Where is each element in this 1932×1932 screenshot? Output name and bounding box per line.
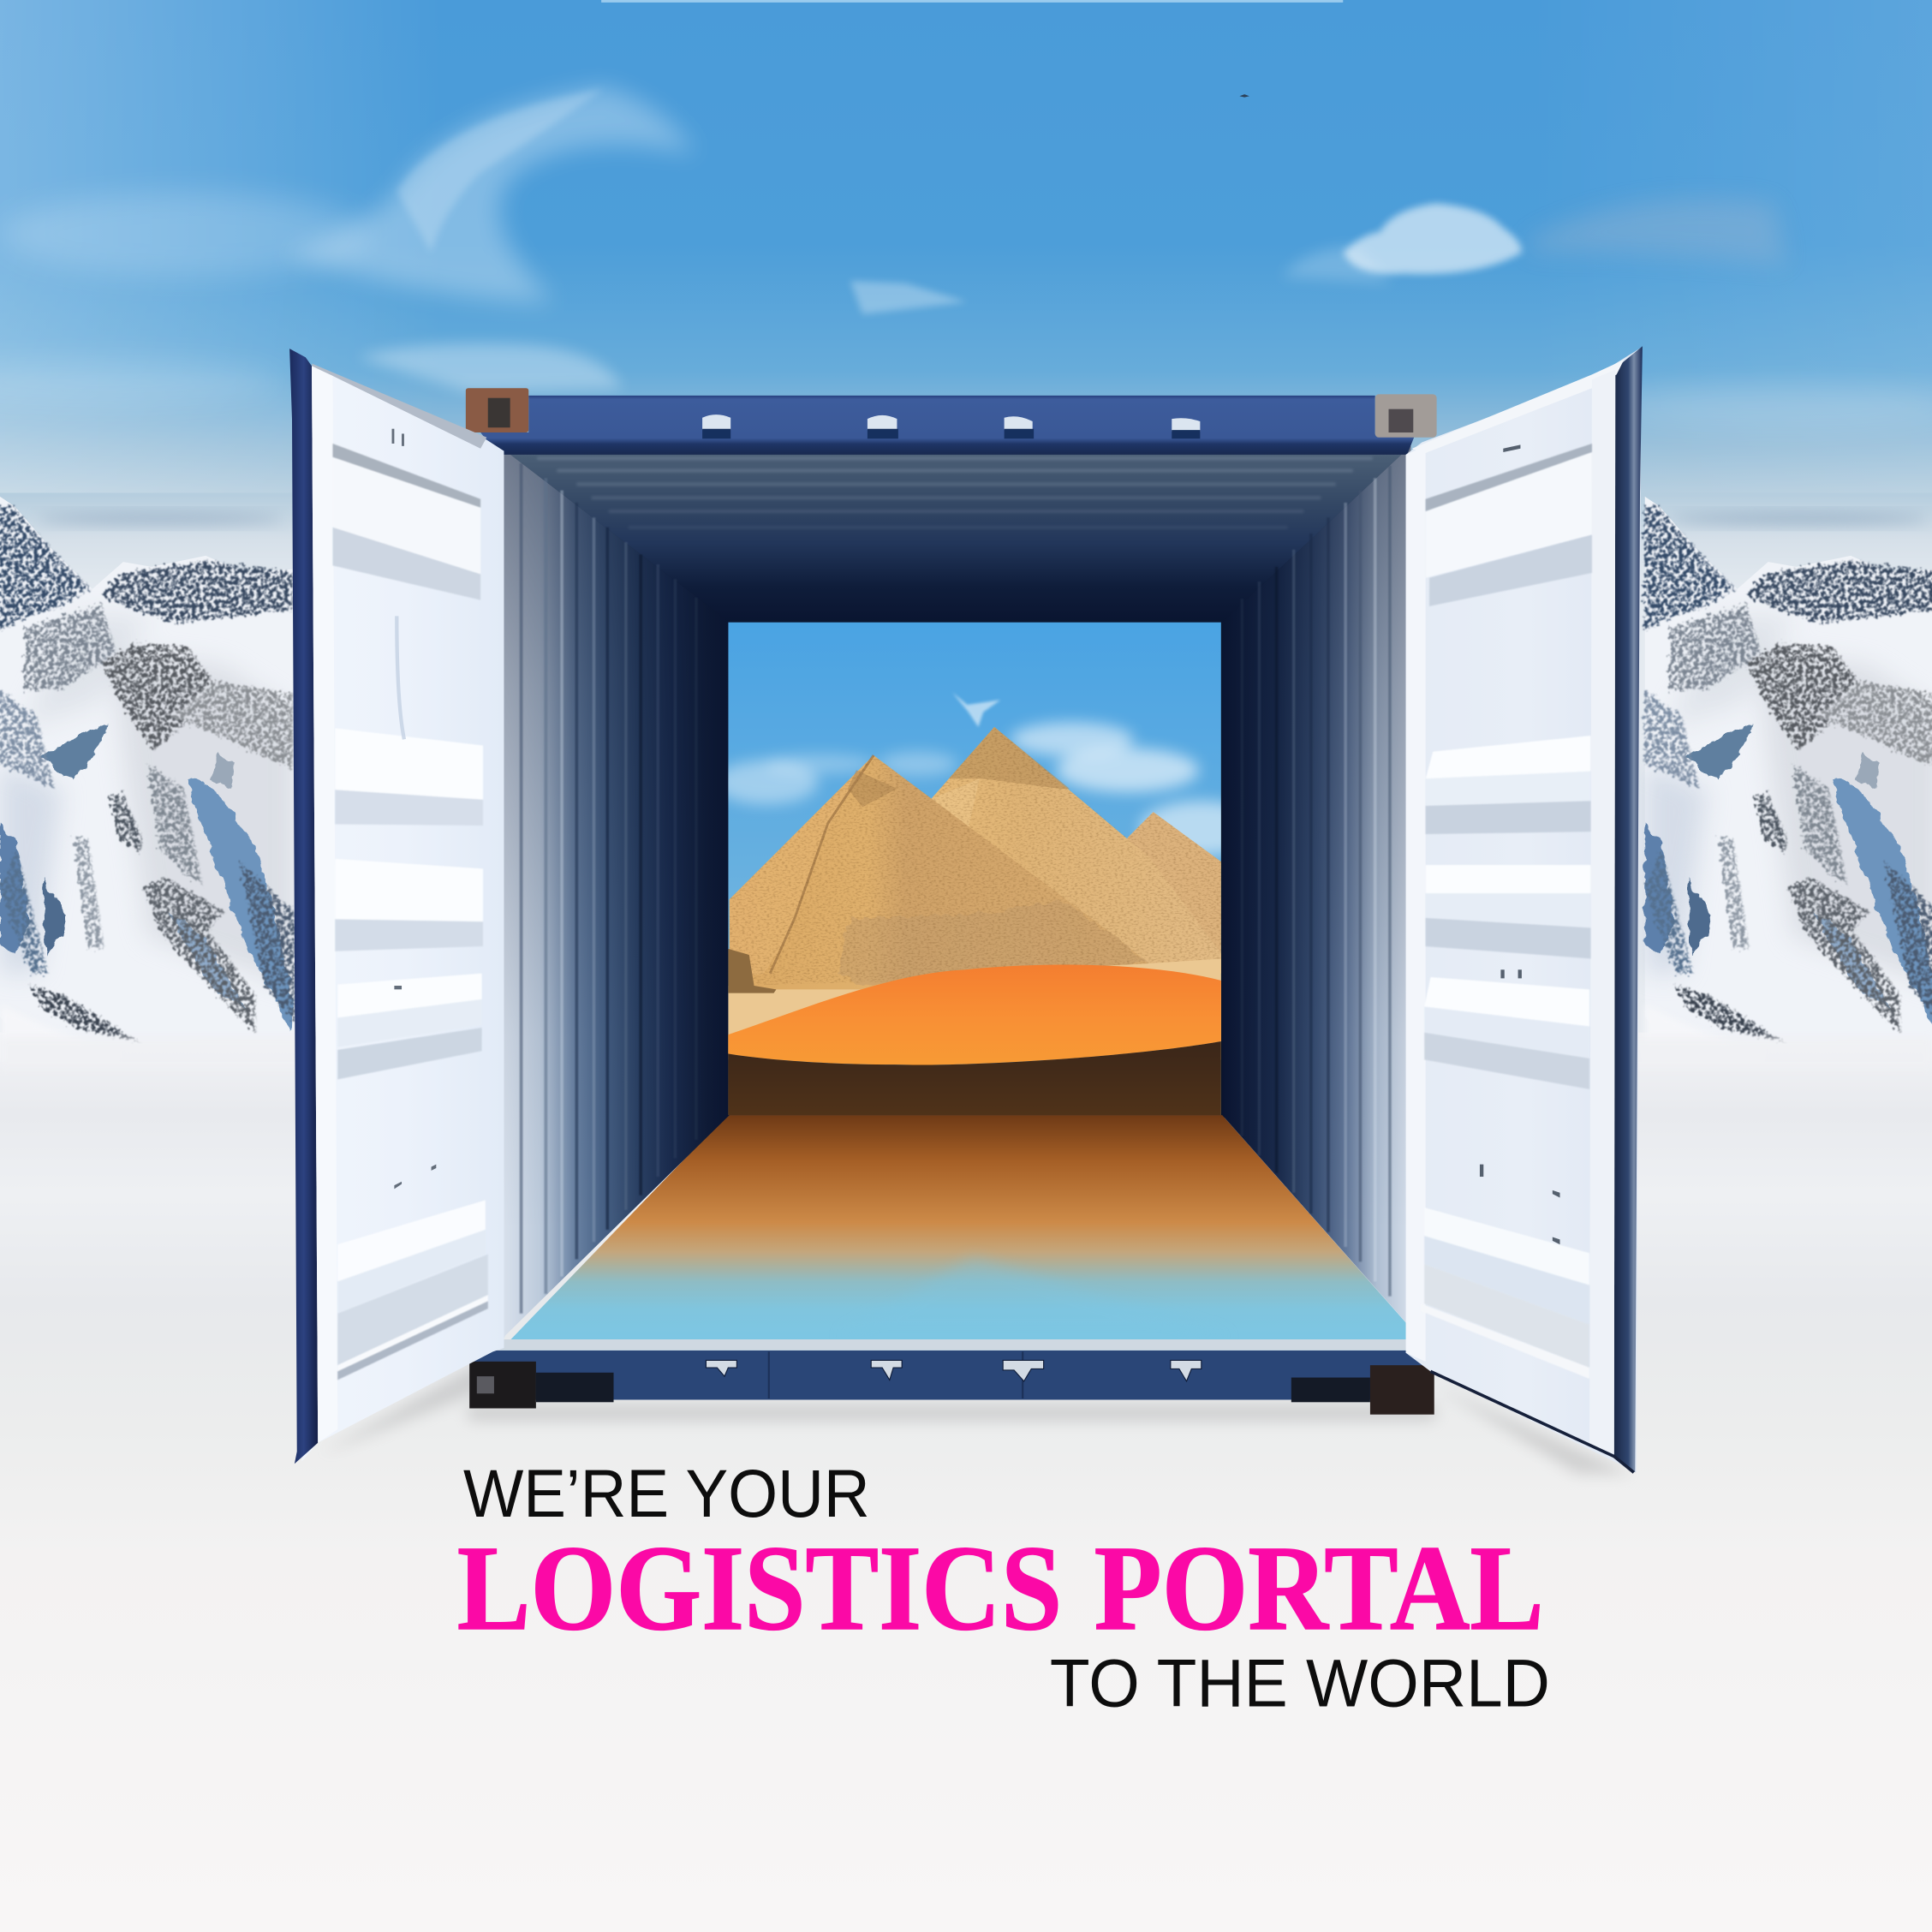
- thin top strip: [601, 0, 1343, 3]
- middle pyramid: [932, 727, 1222, 974]
- door dent: [397, 616, 404, 739]
- bottom beam: [474, 1339, 1429, 1399]
- top beam: [480, 396, 1415, 455]
- line: logistics portal: PORTAL: [1094, 1520, 1544, 1655]
- door bottom edge: [1430, 1371, 1634, 1472]
- white door post: [312, 366, 337, 1443]
- door frame: [1406, 446, 1426, 1362]
- door panels and ribs: [1421, 444, 1592, 1379]
- horizon cloud band: [37, 513, 1929, 525]
- ground haze over mountain base: [0, 1037, 1932, 1070]
- line: logistics portal: LOGISTICS: [457, 1520, 1062, 1655]
- door panels and ribs: [332, 444, 488, 1380]
- ceiling: [499, 446, 1410, 623]
- right door: [1406, 346, 1643, 1472]
- floor: sand fading to ice: [499, 1115, 1417, 1351]
- container interior base: [499, 446, 1410, 1118]
- desert sand: [728, 958, 1222, 1059]
- shipping container: [289, 346, 1643, 1472]
- snowy ground: [0, 1033, 1932, 1932]
- left wall: [499, 446, 730, 1351]
- desert sky clouds: [714, 693, 1263, 856]
- top corner casting right: [1375, 394, 1437, 438]
- bottom locks: [706, 1360, 1202, 1381]
- bottom corner block left: [469, 1362, 614, 1409]
- headline: [457, 1455, 1550, 1721]
- navy door edge: [1614, 346, 1643, 1472]
- line: to the world: TO THE WORLD: [1050, 1645, 1550, 1721]
- white door post: [1589, 370, 1615, 1454]
- orange dune: [727, 965, 1222, 1064]
- line: logistics portal: [457, 1520, 1544, 1655]
- sky side haze: [0, 0, 1932, 493]
- bottom corner block right: [1291, 1365, 1434, 1415]
- small pyramid: [1127, 812, 1221, 973]
- rivets: [1480, 444, 1559, 1244]
- back window: pyramid scene: [714, 623, 1263, 1115]
- sky background: [0, 0, 1932, 1059]
- shadow under container: [320, 1356, 1632, 1474]
- line: we're your: WE’RE YOUR: [463, 1455, 870, 1531]
- left door: [289, 349, 504, 1464]
- clouds: [0, 86, 1932, 429]
- rivets: [392, 429, 436, 1189]
- texture on pyramids: [730, 727, 1222, 986]
- bird: [1239, 94, 1249, 98]
- mountains: right: [1645, 497, 1932, 1062]
- door top lip: [1412, 360, 1624, 453]
- top corner casting left: [466, 388, 528, 432]
- large front pyramid: [730, 755, 1148, 993]
- door top lip: [312, 363, 486, 449]
- top locks: [702, 414, 1200, 438]
- mountains: left: [0, 497, 295, 1043]
- shaded floor band: [727, 1041, 1222, 1115]
- navy door edge: [289, 349, 318, 1464]
- right wall: [1222, 446, 1410, 1331]
- rock debris: [728, 949, 776, 993]
